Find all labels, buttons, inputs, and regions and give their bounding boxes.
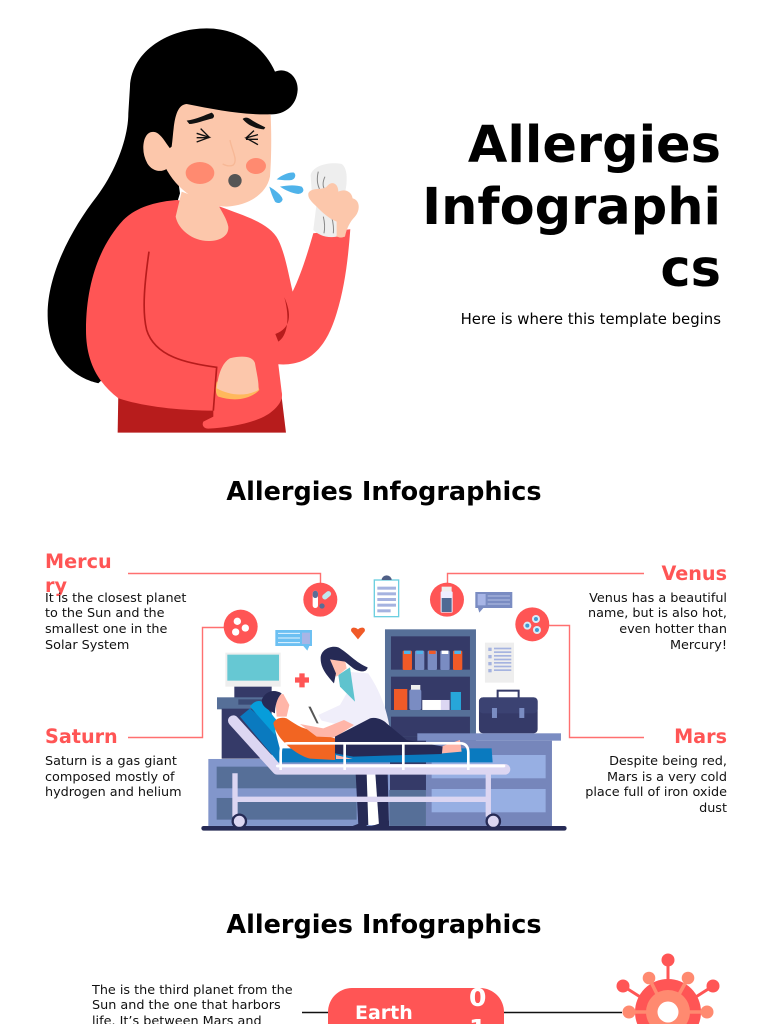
pants	[118, 383, 286, 433]
ear	[143, 132, 174, 171]
tissue	[311, 163, 347, 237]
heading: section two: Allergies Infographics	[226, 910, 542, 940]
cabinet right	[390, 733, 561, 826]
text: Venus description	[588, 590, 727, 653]
text: Venus description: even hotter than	[619, 622, 727, 637]
neck	[176, 192, 228, 241]
text: Mars description: dust	[699, 801, 727, 816]
shelf unit	[385, 629, 476, 743]
label: Venus: Venus	[661, 562, 727, 585]
hand on stomach	[216, 380, 259, 399]
icon: clipboard	[374, 575, 399, 617]
title: Allergies	[468, 116, 721, 175]
text: Mars description	[585, 754, 727, 816]
eyes and brows	[187, 113, 265, 145]
text: Mercury description	[45, 590, 186, 653]
pill number: 0	[469, 983, 486, 1012]
icon: tablets	[224, 610, 258, 644]
label: Mercury: Mercu	[45, 550, 112, 573]
icon: heart	[351, 628, 365, 639]
wheels and floor	[201, 815, 567, 831]
text: Earth description: The is the third planet from the	[92, 982, 293, 998]
text: Mercury description: to the Sun and the	[45, 606, 165, 621]
text: Venus description: name, but is also hot,	[588, 606, 727, 621]
title	[422, 116, 721, 299]
text: Venus description: Mercury!	[670, 638, 727, 653]
monitor	[217, 653, 281, 759]
text: Saturn description	[45, 754, 182, 800]
cabinet left	[208, 759, 426, 826]
subtitle: Here is where this template begins	[461, 310, 721, 328]
document	[485, 643, 514, 683]
text: Saturn description: hydrogen and helium	[45, 785, 182, 800]
nose	[223, 140, 235, 166]
text: Mars description: place full of iron oxide	[585, 785, 727, 800]
text: Saturn description: composed mostly of	[45, 770, 175, 785]
sweater folds	[144, 252, 217, 411]
heading: section one: Allergies Infographics	[226, 477, 542, 507]
title: cs	[660, 240, 721, 299]
label: Mars: Mars	[674, 725, 727, 748]
icon: pills	[303, 583, 337, 617]
text: Mercury description: It is the closest planet	[45, 590, 186, 606]
sweater	[86, 200, 350, 429]
label: Saturn: Saturn	[45, 725, 118, 748]
text: Earth description	[92, 982, 293, 1024]
icon: medical cross	[295, 673, 309, 687]
doctor	[308, 647, 390, 826]
title: Infographi	[422, 178, 721, 237]
face	[163, 104, 271, 207]
bed frame	[233, 721, 505, 817]
pill label: Earth	[355, 1002, 413, 1024]
label: Mercury: ry	[45, 574, 67, 597]
icon: chat bubble right	[475, 592, 512, 613]
text: Mercury description: Solar System	[45, 638, 129, 653]
icon: capsules	[515, 607, 549, 641]
icon: medicine bottle	[430, 583, 464, 617]
patient	[262, 691, 462, 760]
sneeze drops	[269, 172, 303, 203]
text: Saturn description: Saturn is a gas giant	[45, 754, 177, 769]
mouth	[228, 174, 242, 187]
text: Mars description: Mars is a very cold	[607, 770, 727, 785]
text: Earth description: Sun and the one that harbors	[92, 998, 281, 1013]
hair	[48, 28, 298, 383]
hand	[308, 183, 359, 238]
briefcase	[479, 691, 538, 733]
text: Mercury description: smallest one in the	[45, 622, 167, 637]
bed mattress	[280, 748, 493, 762]
cheeks	[186, 162, 214, 184]
text: Mars description: Despite being red,	[609, 754, 727, 769]
label: Mercury	[45, 550, 112, 597]
text: Venus description: Venus has a beautiful	[589, 590, 727, 606]
pill: Earth	[328, 988, 504, 1024]
icon: chat bubble left	[275, 630, 312, 651]
